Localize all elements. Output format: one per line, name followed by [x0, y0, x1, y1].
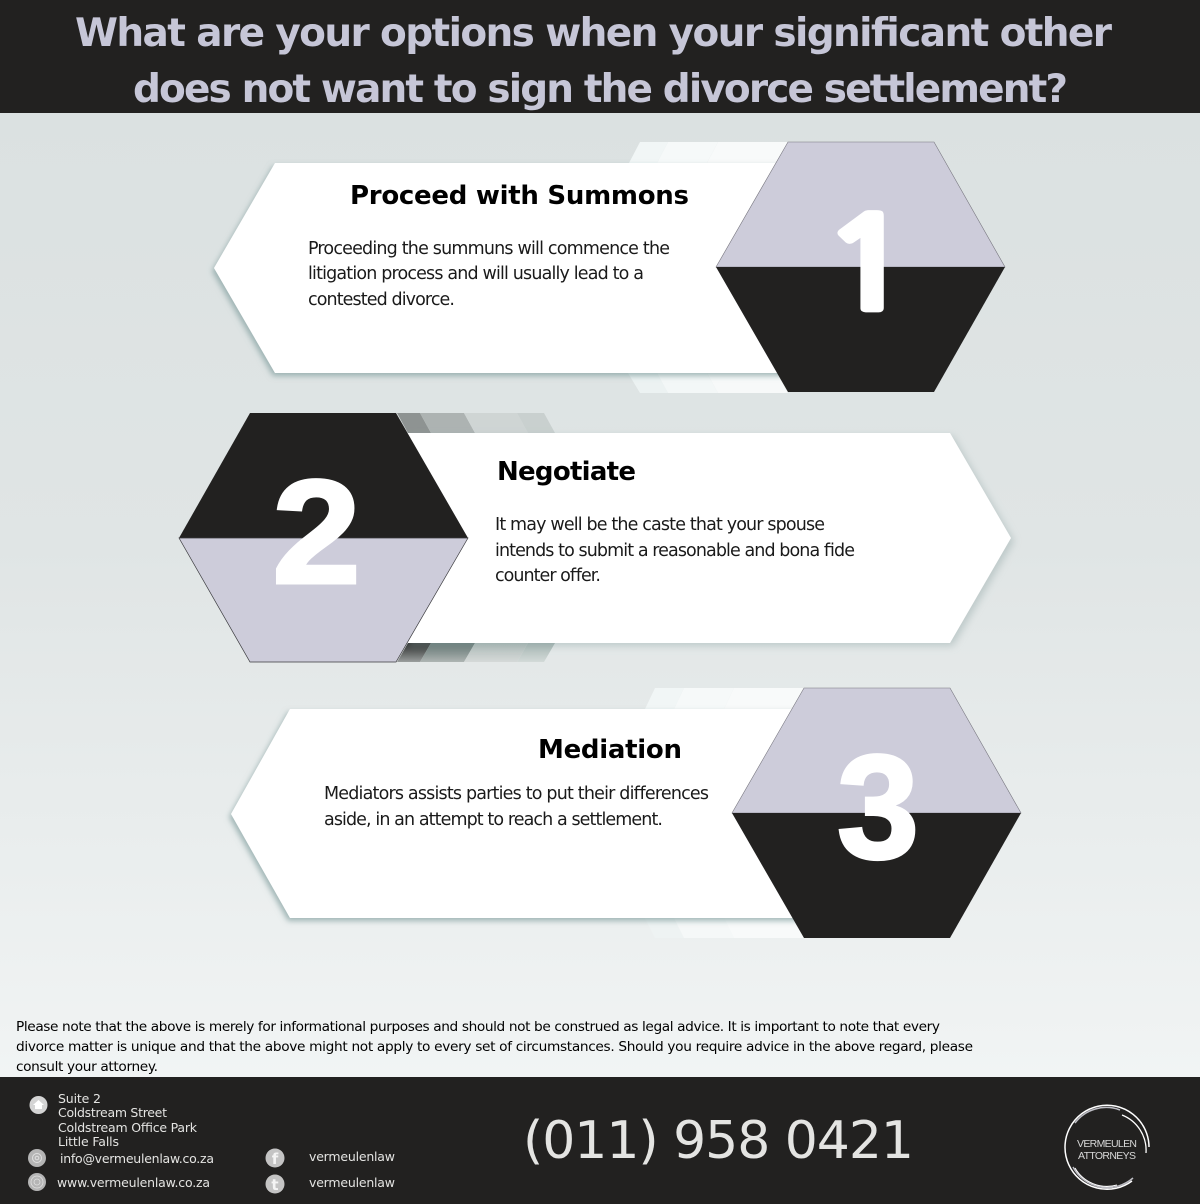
- address: Coldstream Office Park: [58, 1120, 198, 1135]
- address: Coldstream Street: [58, 1105, 167, 1120]
- title banner: What are your options when your significant other: [75, 11, 1113, 56]
- back strips top and bottom: [645, 688, 804, 938]
- hexagon number 1: 1: [820, 202, 917, 329]
- panel: option 3 mediation: [231, 688, 1021, 938]
- icon: twitter: [266, 1174, 284, 1194]
- icon: website: [28, 1173, 46, 1191]
- website: www.vermeulenlaw.co.za: [57, 1175, 210, 1190]
- hexagon number 3: [732, 688, 1021, 938]
- twitter handle: vermeulenlaw: [309, 1175, 395, 1190]
- heading: Negotiate: [497, 457, 636, 487]
- body text: [324, 784, 709, 830]
- icon: home: [30, 1096, 48, 1114]
- title banner: [0, 0, 1200, 113]
- back strips top and bottom: [628, 142, 788, 393]
- body text: Mediators assists parties to put their differences: [324, 784, 709, 804]
- logo: Vermeulen Attorneys: ATTORNEYS: [1078, 1150, 1136, 1162]
- icon: facebook: [266, 1148, 284, 1168]
- body text: [495, 515, 855, 586]
- disclaimer text: Please note that the above is merely for informational purposes and should not be construed as legal advice. It is important to note that every: [16, 1019, 940, 1035]
- icon: twitter: t: [271, 1176, 279, 1194]
- body text: It may well be the caste that your spouse: [495, 515, 825, 535]
- body text: [308, 239, 670, 310]
- body text: aside, in an attempt to reach a settlement.: [324, 810, 663, 830]
- address: Suite 2: [58, 1091, 101, 1106]
- disclaimer text: [16, 1019, 973, 1075]
- icon: facebook: f: [272, 1150, 279, 1168]
- hexagon number 2: 2: [272, 449, 361, 615]
- hexagon number 2: [179, 413, 468, 662]
- disclaimer text: divorce matter is unique and that the above might not apply to every set of circumstances. Should you require advice in the above regard, please: [16, 1039, 973, 1055]
- footer: [0, 1077, 1200, 1204]
- body text: intends to submit a reasonable and bona fide: [495, 541, 855, 561]
- body text: litigation process and will usually lead to a: [308, 264, 644, 284]
- panel: option 1 proceed with summons: [214, 142, 1005, 393]
- white arrow panel: [231, 709, 806, 918]
- body text: counter offer.: [495, 566, 601, 586]
- email: info@vermeulenlaw.co.za: [60, 1151, 214, 1166]
- phone number: (011) 958 0421: [523, 1111, 914, 1171]
- panel: option 2 negotiate: [179, 413, 1011, 662]
- logo: Vermeulen Attorneys: [1065, 1105, 1149, 1189]
- heading: Proceed with Summons: [350, 181, 689, 211]
- address: [58, 1091, 198, 1149]
- hexagon number 3: 3: [837, 725, 919, 890]
- disclaimer text: consult your attorney.: [16, 1059, 158, 1075]
- address: Little Falls: [58, 1134, 119, 1149]
- back strips top and bottom: [397, 413, 555, 662]
- body text: Proceeding the summuns will commence the: [308, 239, 670, 259]
- icon: email: [28, 1149, 46, 1167]
- facebook handle: vermeulenlaw: [309, 1149, 395, 1164]
- body text: contested divorce.: [308, 290, 455, 310]
- hexagon number 1: [716, 142, 1005, 392]
- title banner: does not want to sign the divorce settlement?: [133, 67, 1068, 112]
- logo: Vermeulen Attorneys: VERMEULEN: [1077, 1138, 1137, 1150]
- white arrow panel: [214, 163, 790, 373]
- heading: Mediation: [538, 735, 682, 765]
- white arrow panel: [405, 433, 1011, 643]
